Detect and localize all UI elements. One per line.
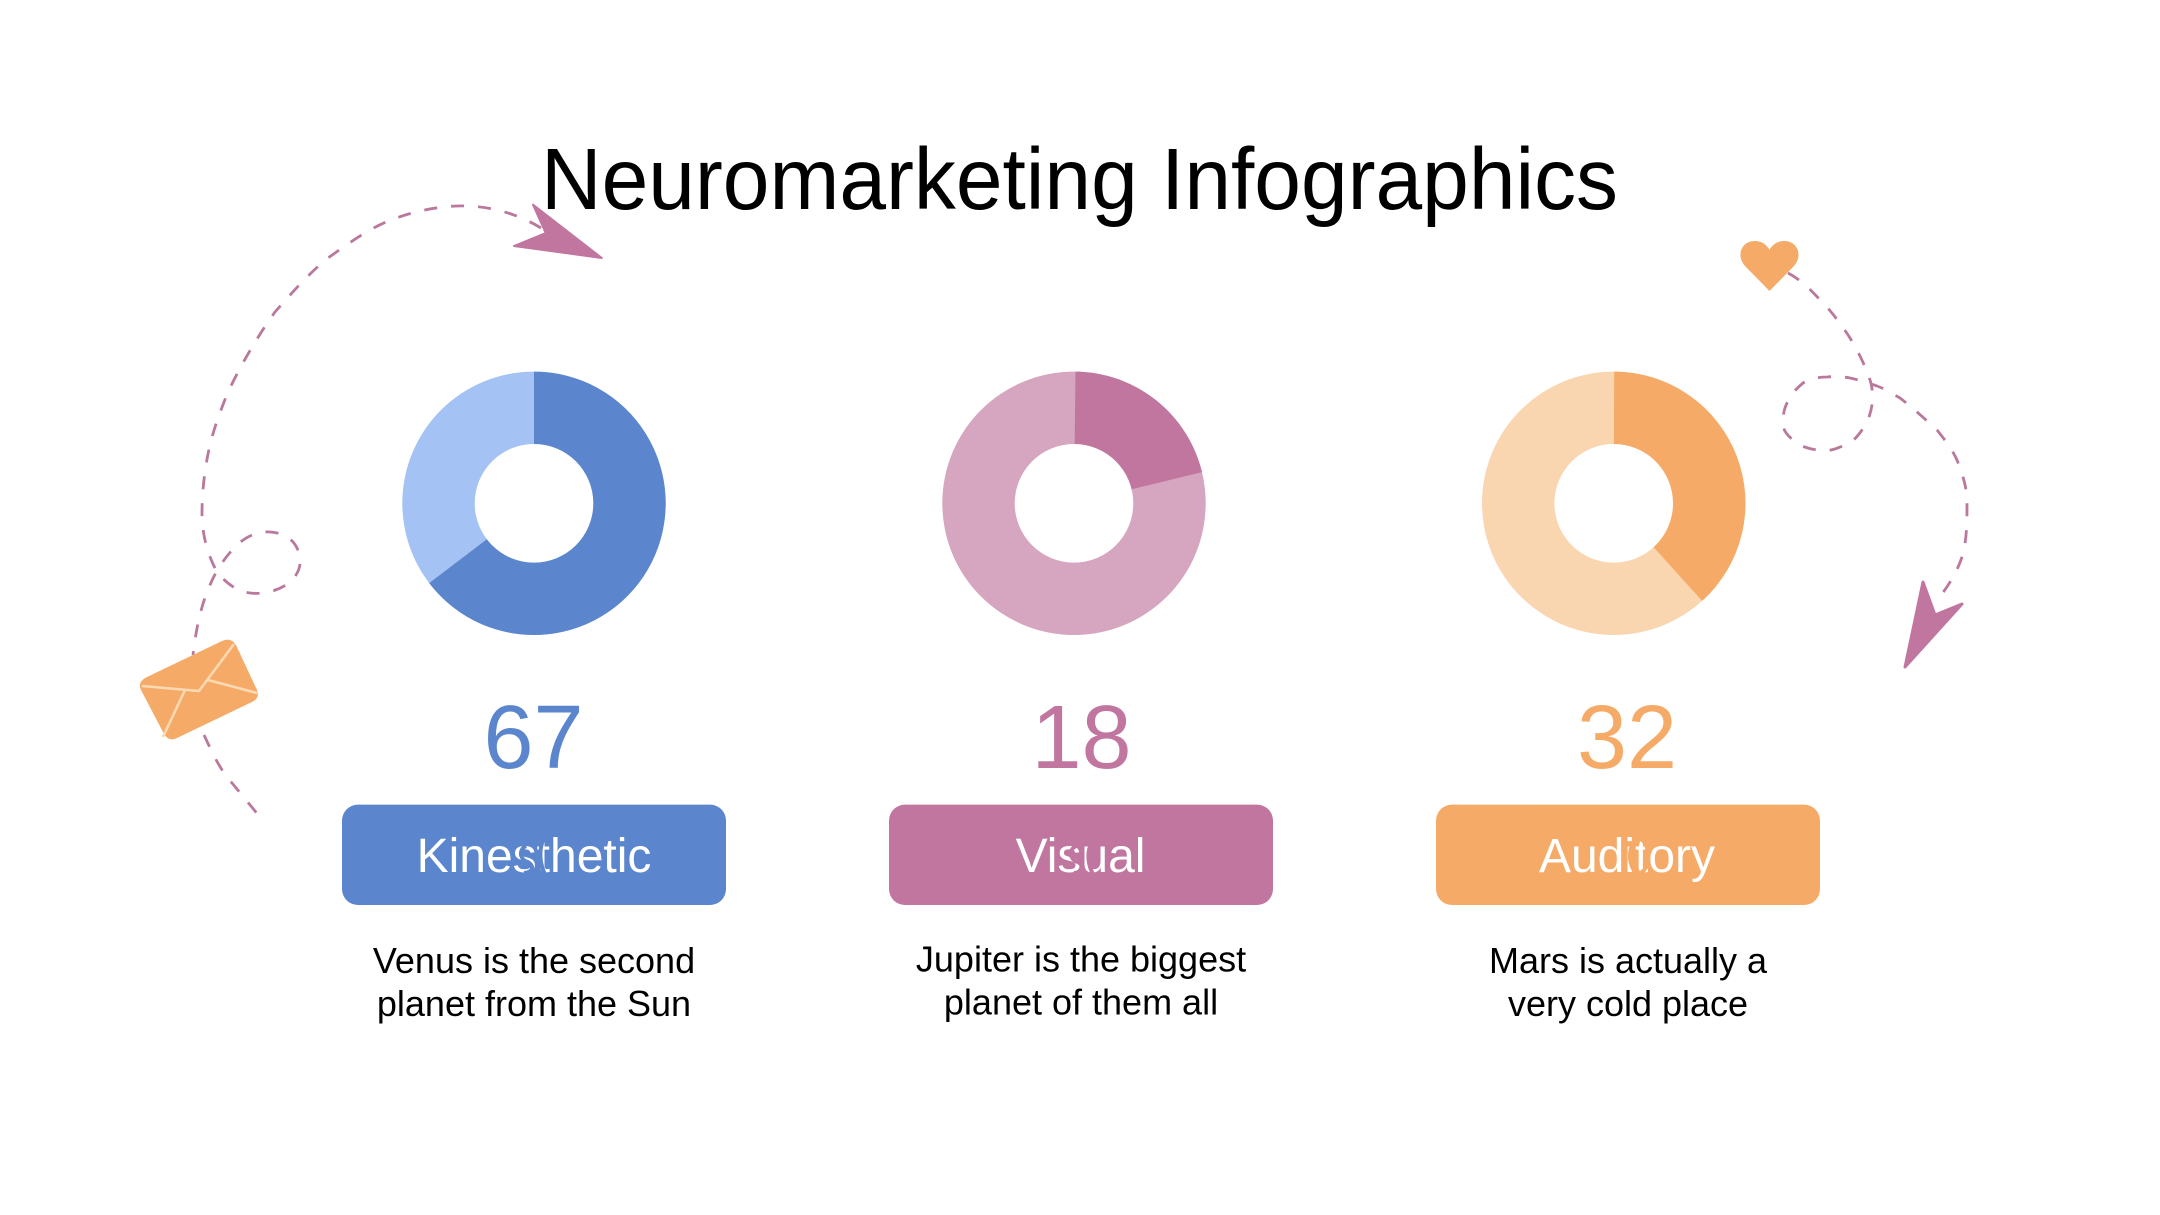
donut chart: visual [942,372,1206,635]
description: jupiter: planet of them all [944,982,1218,1023]
icon: heart [1740,241,1799,291]
description: venus: Venus is the second [373,940,695,981]
label: auditory: Auditory [1539,830,1715,883]
label: kinesthetic: Kinesthetic [417,830,651,883]
number: 18: 18 [1031,688,1132,788]
label: visual: Visual [1016,830,1145,883]
number: 67: 67 [483,688,584,788]
donut chart: kinesthetic [402,372,666,635]
title: Neuromarketing Infographics [541,131,1618,228]
icon: envelope [140,640,258,739]
label: auditory [1436,805,1820,905]
icon: pink arrowhead right [1905,582,1962,667]
dashed path: left loop [193,206,541,823]
description: jupiter: Jupiter is the biggest [916,939,1246,980]
number: 32: 32 [1577,688,1677,788]
donut chart: auditory [1482,372,1745,635]
description: venus: planet from the Sun [377,983,691,1024]
label: kinesthetic [342,805,726,905]
dashed path: right loop [1783,273,1967,600]
description: mars: very cold place [1508,983,1748,1024]
label: visual [889,805,1273,905]
description: mars: Mars is actually a [1489,940,1768,981]
icon: pink arrowhead top [514,205,602,258]
